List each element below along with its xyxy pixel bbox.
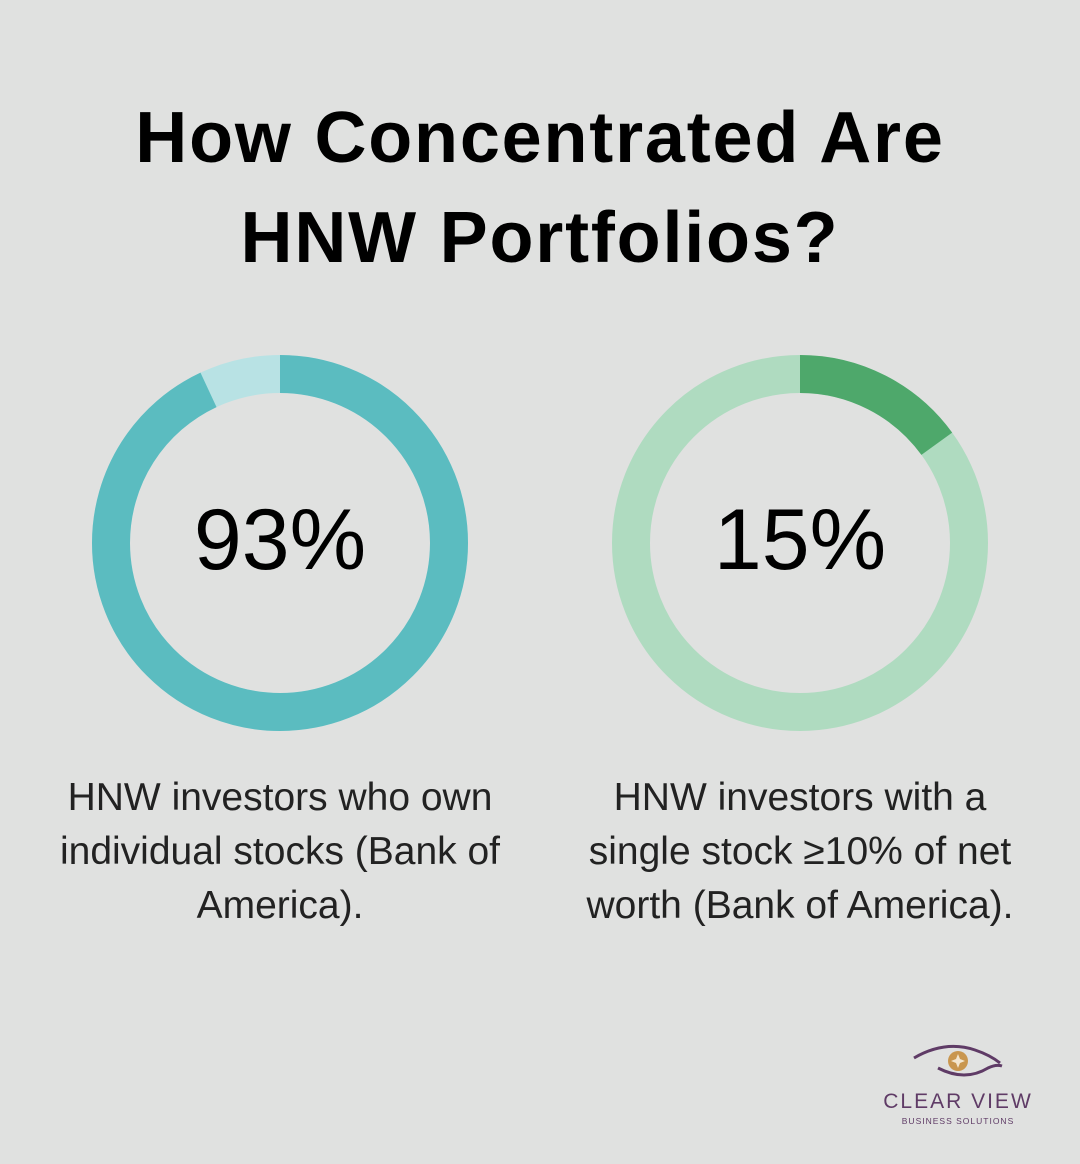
title: How Concentrated Are (135, 98, 945, 178)
caption left: America). (197, 884, 363, 927)
caption right (586, 776, 1013, 927)
donut: 15% (631, 374, 969, 712)
title: HNW Portfolios? (241, 198, 839, 278)
donut: 15%: 15% (714, 492, 886, 588)
title (135, 98, 945, 278)
caption right: single stock ≥10% of net (589, 830, 1011, 873)
caption left (60, 776, 500, 927)
caption right: worth (Bank of America). (586, 884, 1013, 927)
logo: CLEAR VIEW (883, 1090, 1033, 1113)
donut: 93% (111, 374, 449, 712)
logo (883, 1046, 1033, 1126)
caption left: HNW investors who own (68, 776, 492, 819)
caption left: individual stocks (Bank of (60, 830, 500, 873)
donut: 93%: 93% (194, 492, 366, 588)
caption right: HNW investors with a (614, 776, 986, 819)
logo: BUSINESS SOLUTIONS (902, 1116, 1014, 1126)
